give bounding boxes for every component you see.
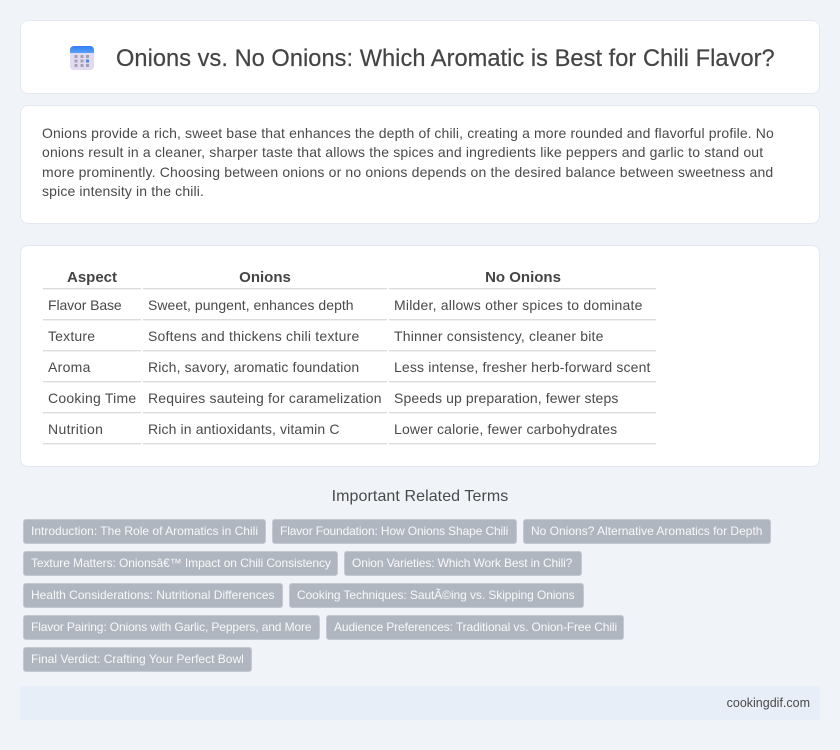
comparison table: Less intense, fresher herb-forward scent [394,359,651,375]
intro text: onions result in a cleaner, sharper taste that allows the spices and ingredients like peppers and garlic to stand out [42,144,763,160]
heading: related terms: Important Related Terms [332,488,508,505]
intro text: spice intensity in the chili. [42,183,204,199]
related terms chips: Introduction: The Role of Aromatics in Chili [31,524,258,538]
related terms chips: Cooking Techniques: SautÃ©ing vs. Skipping Onions [297,588,575,602]
comparison table: Sweet, pungent, enhances depth [148,297,354,313]
comparison table: Aroma [48,359,91,375]
related terms chips: Flavor Pairing: Onions with Garlic, Peppers, and More [31,620,311,634]
comparison table: Speeds up preparation, fewer steps [394,390,618,406]
comparison table: Nutrition [48,421,103,437]
footer source: cookingdif.com [727,696,810,710]
comparison table [43,269,656,445]
related terms chips: Audience Preferences: Traditional vs. Onion-Free Chili [334,620,617,634]
related terms chips: Flavor Foundation: How Onions Shape Chili [280,524,508,538]
intro text: more prominently. Choosing between onions or no onions depends on the desired balance between sweetness and [42,164,773,180]
footer bar [20,686,820,720]
panel: comparison table [20,245,820,467]
comparison table: Thinner consistency, cleaner bite [394,328,604,344]
comparison table: No Onions [485,269,561,286]
comparison table: Texture [48,328,95,344]
intro text [42,125,774,199]
comparison table: Softens and thickens chili texture [148,328,359,344]
comparison table: Requires sauteing for caramelization [148,390,382,406]
comparison table: Onions [239,269,291,286]
comparison table: Milder, allows other spices to dominate [394,297,643,313]
title: Onions vs. No Onions: Which Aromatic is Best for Chili Flavor? [116,46,775,72]
icon: calendar [70,46,94,70]
comparison table: Flavor Base [48,297,122,313]
panel: intro paragraph [20,105,820,224]
related terms chips: Final Verdict: Crafting Your Perfect Bowl [31,652,244,666]
comparison table: Rich in antioxidants, vitamin C [148,421,340,437]
related terms chips: Texture Matters: Onionsâ€™ Impact on Chili Consistency [31,556,331,570]
related terms chips: Health Considerations: Nutritional Differences [31,588,274,602]
related terms chips [23,519,771,672]
related terms chips: No Onions? Alternative Aromatics for Depth [531,524,762,538]
panel: title card [20,20,820,94]
comparison table: Cooking Time [48,390,136,406]
intro text: Onions provide a rich, sweet base that enhances the depth of chili, creating a more rounded and flavorful profile. No [42,125,774,141]
comparison table: Rich, savory, aromatic foundation [148,359,359,375]
related terms chips: Onion Varieties: Which Work Best in Chili? [352,556,572,570]
comparison table: Lower calorie, fewer carbohydrates [394,421,617,437]
comparison table: Aspect [67,269,117,286]
